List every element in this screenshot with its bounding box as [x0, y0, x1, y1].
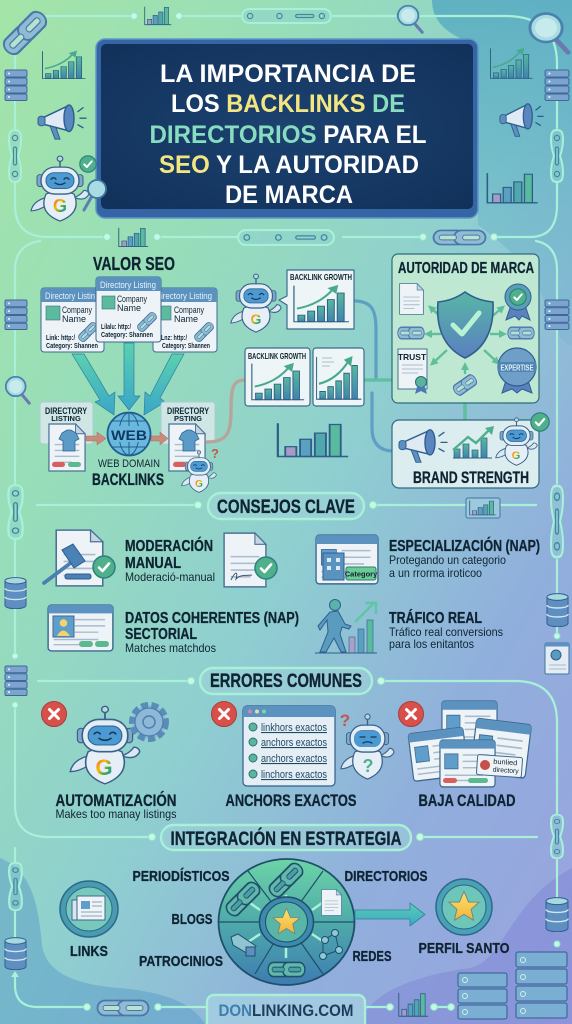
label: automatizacion: [56, 791, 176, 821]
icon: x: [42, 702, 66, 726]
directory card center: Lilalu: http:/: [101, 324, 131, 331]
red arrows to and from web: [86, 432, 168, 445]
error: anchors exactos: [212, 702, 394, 810]
label: especializacion: a un rrorma iroticoo: [389, 566, 482, 580]
label: redes: REDES: [352, 948, 392, 965]
icon: building window: [316, 535, 378, 584]
label: brand strength: BRAND STRENGTH: [413, 468, 529, 487]
chart card: backlink growth 1: BACKLINK GROWTH: [290, 272, 352, 282]
title: LA IMPORTANCIA DE: [160, 60, 416, 88]
heading: consejos clave: [208, 493, 364, 519]
label: patrocinios: PATROCINIOS: [139, 953, 223, 970]
directory card left: Link: http:/: [46, 335, 75, 342]
chart card: backlink growth 2: [245, 348, 310, 406]
directory card left: Directory Listin: [45, 291, 95, 302]
arrows from shield: [428, 308, 503, 374]
label: datos coherentes: DATOS COHERENTES (NAP): [125, 610, 299, 627]
anchor list window: [243, 706, 335, 786]
panel: autoridad de marca: [392, 254, 539, 403]
icon: gear: [132, 705, 166, 739]
chain on left card: [77, 321, 99, 343]
icon: magnifier top: [398, 6, 422, 32]
directory listing left: DIRECTORY: [45, 406, 87, 416]
robot small with question: [182, 446, 219, 492]
icon: walker with chart: [315, 600, 377, 653]
heading: errores comunes: ERRORES COMUNES: [210, 671, 362, 692]
icon: check: [531, 413, 549, 431]
icon: chain top left: [0, 8, 50, 58]
server stack small: [458, 973, 507, 1019]
expertise badge: EXPERTISE: [500, 364, 534, 372]
trust document: [398, 349, 427, 394]
background blob: top right: [432, 0, 572, 345]
windows stack: directory: [492, 767, 519, 775]
heading: integracion en estrategia: INTEGRACIÓN EN ESTRATEGIA: [170, 828, 402, 850]
anchor list window: anchors exactos: [261, 737, 327, 749]
directory card center: Directory Listing: [100, 280, 156, 291]
robot with speech chart: G: [251, 311, 262, 327]
directory card right: [153, 288, 217, 352]
tip: moderacion manual: [44, 530, 277, 587]
icon: database right bottom: [546, 898, 568, 932]
label: moderacion manual: MANUAL: [125, 555, 181, 572]
icon: gavel document: [44, 530, 115, 586]
icon: document: [322, 890, 341, 915]
title: SEO Y LA AUTORIDAD: [159, 151, 419, 179]
chart card: growth 3: [313, 348, 364, 406]
directory posting right: [161, 402, 215, 471]
heading: valor seo: VALOR SEO: [93, 254, 175, 274]
icon: links circle: [60, 881, 118, 937]
label: datos coherentes: Matches matchdos: [125, 641, 216, 655]
directory card right: Lnz: http:/: [161, 335, 187, 342]
icon: chain bottom: [268, 962, 305, 977]
robot mascot with magnifier: [31, 156, 106, 221]
title panel: [96, 39, 478, 218]
icon: web globe: [108, 412, 150, 456]
windows stack: [408, 701, 531, 787]
directory card left: Company: [62, 305, 92, 315]
label: moderacion manual: Moderació-manual: [125, 570, 215, 584]
icon: megaphone right: [500, 104, 543, 136]
anchor list window: linkhors exactos: [261, 722, 327, 734]
directory card center: Name: [117, 303, 141, 313]
label: anchors exactos: ANCHORS EXACTOS: [226, 791, 356, 810]
icon: link pill top: [242, 9, 331, 23]
label: especializacion: Protegando un categorio: [389, 553, 506, 567]
icon: chain upper left: [224, 880, 262, 918]
directory card right: Company: [174, 305, 204, 315]
label: trafico real: para los enitantos: [389, 637, 474, 651]
directory listing left: [40, 402, 93, 471]
icon: magnifier left: [6, 377, 29, 403]
robot confused: ?: [362, 756, 374, 776]
anchor list window: linchors exactos: [261, 769, 327, 781]
directory posting right: DIRECTORY: [167, 406, 209, 416]
error: automatizacion: [42, 702, 176, 821]
heading: consejos clave: CONSEJOS CLAVE: [217, 497, 355, 518]
robot small with question: G: [195, 479, 203, 490]
label: periodisticos: PERIODÍSTICOS: [132, 868, 230, 885]
icon: server left section 2: [5, 300, 27, 330]
directory card center: [96, 277, 161, 342]
icon: server right top: [545, 70, 569, 100]
tip: datos coherentes: [48, 605, 299, 655]
arrows into web: [72, 343, 184, 415]
label: trafico real: [389, 610, 503, 651]
icon: server right section 2: [545, 300, 569, 330]
label: moderacion manual: [125, 537, 215, 584]
label: backlinks: BACKLINKS: [92, 470, 164, 489]
icon: trend chart top left: [43, 51, 85, 79]
growth chart: [453, 426, 494, 458]
footer: donlinking.com: [207, 995, 365, 1024]
label: directorios: DIRECTORIOS: [344, 868, 428, 885]
question mark: ?: [340, 711, 350, 730]
directory card right: Category: Shannen: [162, 343, 210, 350]
label: especializacion: ESPECIALIZACIÓN (NAP): [389, 537, 540, 555]
trust document: TRUST: [398, 352, 427, 362]
icon: trend chart top right: [490, 48, 532, 78]
label: perfil santo: PERFIL SANTO: [418, 940, 510, 957]
anchor list window: anchors exactos: [261, 753, 327, 765]
chart card: backlink growth 2: BACKLINK GROWTH: [248, 351, 306, 361]
label: moderacion manual: MODERACIÓN: [125, 537, 213, 555]
icon: server left lower: [5, 666, 27, 696]
icon: magnifier top right: [530, 14, 568, 52]
tip: especializacion: [316, 535, 540, 584]
icon: chain pill right middle: [551, 486, 563, 557]
icon: profile window: [48, 605, 113, 651]
icon: database right: [547, 594, 568, 627]
error: baja calidad: [398, 701, 531, 810]
icon: shield: [438, 292, 493, 358]
icon: chain pill right: [551, 130, 563, 182]
icon: link pill below title: [238, 230, 334, 245]
icon: document: [400, 284, 423, 314]
icon: signed document: [224, 533, 277, 587]
icon: server left top: [5, 70, 27, 100]
heading: integracion en estrategia: [161, 825, 411, 850]
panel: brand strength: [392, 413, 549, 488]
label: datos coherentes: [125, 610, 299, 655]
robot: [496, 418, 537, 465]
footer: donlinking.com: DONLINKING.COM: [218, 1001, 354, 1020]
icon: chain top: [267, 861, 305, 899]
icon: chain right: [508, 327, 534, 339]
robot mascot with magnifier: G: [53, 196, 67, 216]
label: trafico real: TRÁFICO REAL: [389, 610, 482, 627]
arrow to perfil: [355, 903, 425, 926]
directory card right: irectory Listing: [161, 291, 212, 302]
icon: bars footer: [399, 993, 428, 1016]
tip: trafico real: [315, 600, 503, 653]
icon: megaphone: [399, 430, 447, 462]
robot confused: [341, 714, 394, 779]
center star: [260, 897, 314, 947]
directory card center: Company: [117, 294, 147, 304]
expertise badge: [498, 348, 536, 393]
icon: network: [320, 930, 342, 960]
robot small with question: ?: [211, 446, 219, 461]
directory card left: Category: Shannen: [46, 343, 98, 350]
icon: megaphone left: [38, 105, 86, 139]
connectors to autoridad: [207, 301, 465, 451]
directory posting right: PSTING: [174, 414, 202, 423]
label: automatizacion: AUTOMATIZACIÓN: [56, 791, 176, 810]
icon: small chart right: [466, 498, 500, 518]
icon: megaphone in wheel: [231, 934, 256, 956]
background blob: bottom right: [360, 868, 572, 1024]
icon: database left bottom: [5, 938, 26, 970]
title: [150, 60, 426, 209]
label: automatizacion: Makes too manay listings: [56, 807, 176, 821]
icon: chain pill left: [9, 130, 21, 182]
directory card center: Category: Shannen: [101, 332, 153, 339]
icon: small bars top: [145, 7, 171, 25]
server stack large: [516, 952, 567, 1018]
icon: award badge: [505, 284, 531, 320]
directory listing left: LISTING: [51, 414, 81, 423]
label: web domain: WEB DOMAIN: [98, 458, 160, 470]
directory card left: [41, 288, 104, 352]
directory card right: Name: [174, 314, 198, 324]
icon: chain left: [398, 327, 424, 339]
robot with G: G: [95, 755, 113, 780]
icon: chain below title: [434, 230, 485, 245]
label: datos coherentes: SECTORIAL: [125, 626, 197, 643]
icon: x: [212, 702, 236, 726]
label: links: LINKS: [70, 943, 108, 960]
icon: web globe: WEB: [111, 428, 147, 443]
robot: G: [512, 450, 520, 462]
windows stack: bunlied: [493, 759, 518, 767]
label: especializacion: [389, 537, 540, 580]
robot with speech chart: [231, 270, 354, 332]
heading: errores comunes: [200, 668, 372, 694]
background blob: bottom left: [0, 858, 205, 1024]
title: DIRECTORIOS PARA EL: [150, 121, 426, 149]
icon: chain pill left middle: [8, 485, 23, 539]
icon: chain pill left bottom: [9, 863, 22, 910]
title: DE MARCA: [225, 181, 353, 209]
label: trafico real: Tráfico real conversions: [389, 625, 503, 639]
icon: chain pill right lower: [551, 815, 563, 858]
bar chart center: [278, 423, 348, 457]
wheel diagram: [218, 859, 355, 985]
icon: chain bottom: [452, 373, 478, 397]
label: blogs: BLOGS: [172, 911, 212, 928]
icon: star circle: [436, 879, 492, 935]
directory card left: Name: [62, 314, 86, 324]
label: baja calidad: BAJA CALIDAD: [418, 791, 516, 810]
icon: database left: [5, 578, 26, 609]
icon: chain bottom left: [98, 1000, 148, 1016]
title: LOS BACKLINKS DE: [171, 90, 405, 118]
icon: bar chart right: [487, 173, 538, 203]
icon: report right: [545, 643, 569, 674]
icon: building window: Category: [345, 570, 378, 578]
icon: bars below title: [119, 228, 148, 247]
icon: x: [398, 702, 424, 726]
